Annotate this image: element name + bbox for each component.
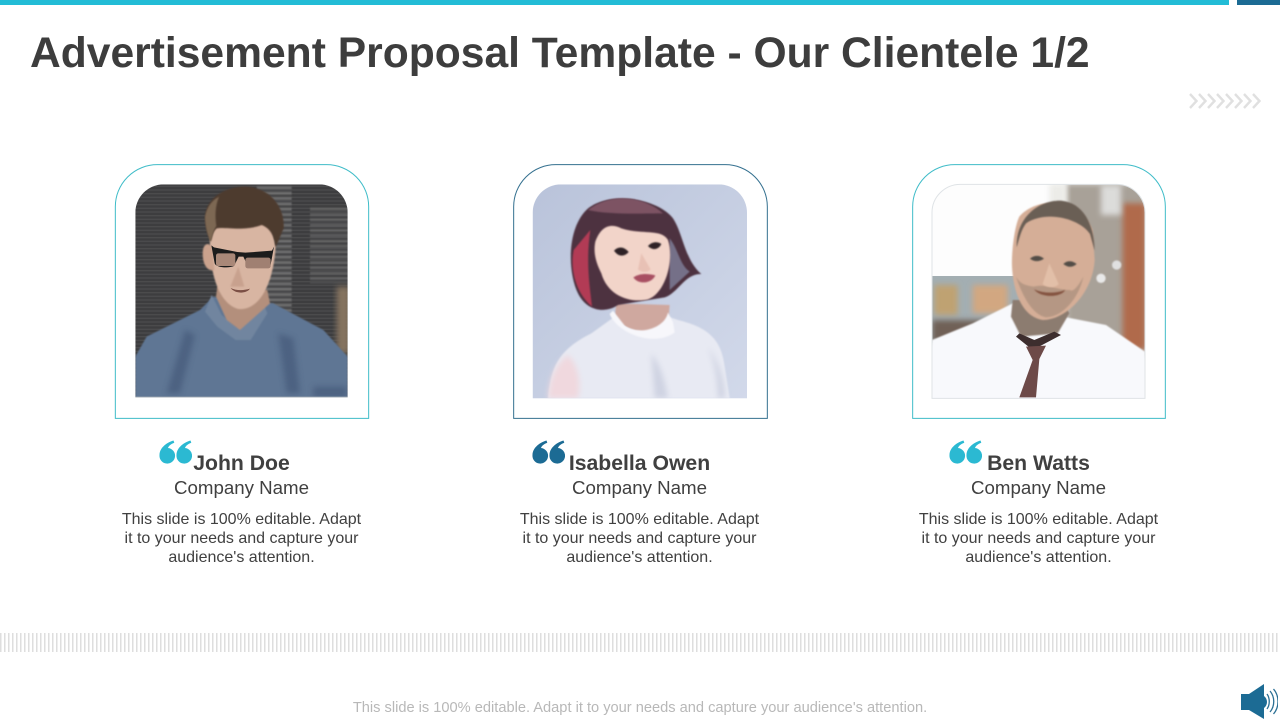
description: This slide is 100% editable. Adapt	[919, 510, 1158, 528]
description	[520, 510, 759, 566]
portrait: Isabella Owen	[513, 164, 768, 419]
company name: Company Name	[971, 477, 1106, 498]
top accent bar	[0, 0, 1280, 5]
name: Ben Watts: Ben Watts	[987, 452, 1090, 475]
description: audience's attention.	[566, 549, 713, 566]
panel: John Doe	[114, 164, 370, 566]
description: This slide is 100% editable. Adapt	[520, 510, 759, 528]
description: audience's attention.	[168, 549, 315, 566]
company name: Company Name	[174, 477, 309, 498]
name: John Doe: John Doe	[193, 452, 290, 475]
description: it to your needs and capture your	[922, 530, 1155, 547]
description	[919, 510, 1158, 566]
panel: Isabella Owen	[513, 164, 768, 566]
name: Isabella Owen: Isabella Owen	[569, 452, 710, 475]
company name: Company Name	[572, 477, 707, 498]
footer note: This slide is 100% editable. Adapt it to your needs and capture your audience's attention.	[353, 700, 927, 716]
icon: quote mark	[532, 440, 565, 464]
icon: quote mark	[159, 440, 192, 464]
panel: Ben Watts	[912, 164, 1166, 566]
title: Advertisement Proposal Template - Our Clientele 1/2	[30, 29, 1090, 77]
description: audience's attention.	[965, 549, 1112, 566]
description: This slide is 100% editable. Adapt	[122, 510, 361, 528]
description: it to your needs and capture your	[523, 530, 756, 547]
portrait: John Doe	[114, 164, 370, 419]
description: it to your needs and capture your	[125, 530, 358, 547]
icon: chevrons	[1189, 93, 1261, 109]
icon: speaker	[1241, 684, 1278, 719]
icon: quote mark	[949, 440, 982, 464]
portrait: Ben Watts	[912, 164, 1166, 419]
description	[122, 510, 361, 566]
